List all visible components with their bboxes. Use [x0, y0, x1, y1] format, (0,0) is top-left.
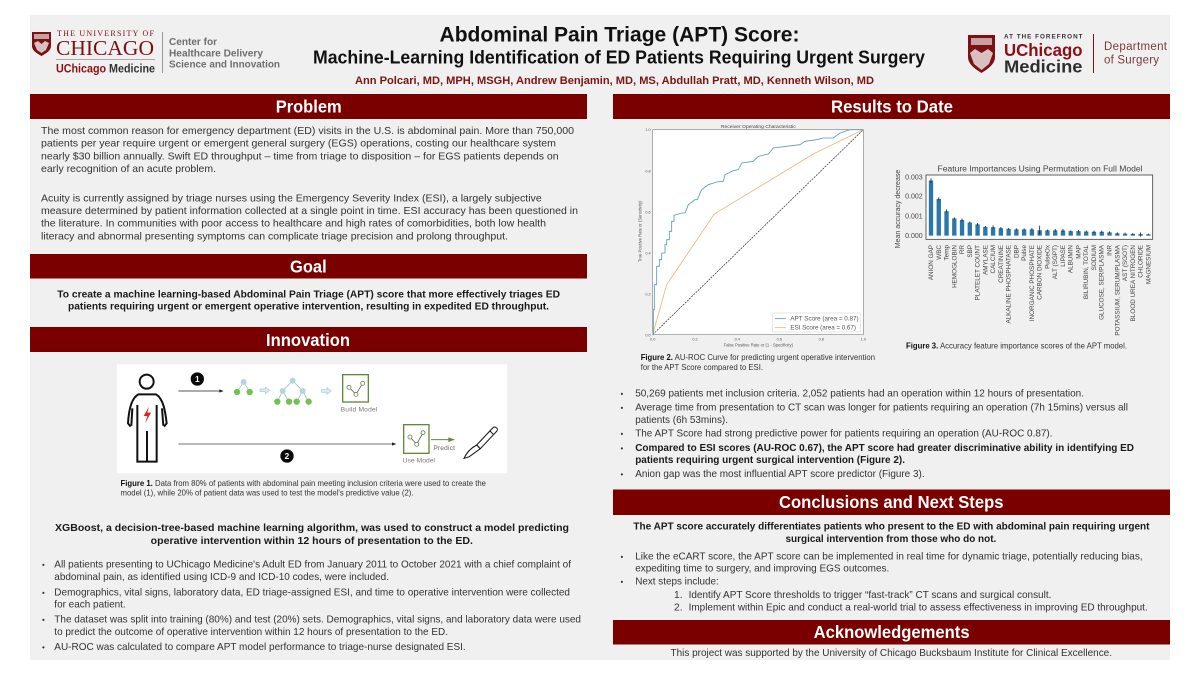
- logo: UChicago Medicine Department of Surgery: Department: [1104, 41, 1168, 53]
- caption: figure 2: [641, 353, 875, 372]
- chart: feature importances: 0.000: [905, 233, 923, 240]
- list: results bullets: •: [620, 470, 624, 479]
- list: methods bullets: to predict the outcome of operative intervention within 12 hours of presentation to the ED.: [54, 627, 448, 638]
- logo: UChicago Medicine Department of Surgery: of Surgery: [1104, 54, 1159, 66]
- chart: feature importances: HEMOGLOBIN: [951, 245, 958, 288]
- text: XGBoost statement: [55, 523, 569, 547]
- text: goal statement: [57, 289, 560, 312]
- chart: ROC curve: Receiver Operating Characteristic: [721, 124, 796, 130]
- chart: feature importances: [895, 165, 1153, 336]
- list: results bullets: •: [620, 444, 624, 453]
- text: goal statement: patients requiring urgent or emergent operative intervention, resulting in expedited ED throughput.: [68, 301, 549, 312]
- chart: ROC curve: [637, 124, 866, 347]
- list: methods bullets: All patients presenting to UChicago Medicine's Adult ED from January 2011 to October 2021 with a chief complaint of: [54, 560, 571, 570]
- text: problem paragraphs: nearly $30 billion annually. Swift ED throughput – time from triage to disposition – for EGS patients depends on: [41, 151, 559, 162]
- chart: feature importances: LIPASE: [1060, 245, 1067, 267]
- caption: figure 1: model (1), while 20% of patient data was used to test the model's predictive value (2).: [120, 488, 414, 498]
- chart: ROC curve: 0.6: [645, 211, 651, 215]
- icon: use model and predict: [403, 425, 455, 465]
- list: next steps: expediting time to surgery, and improving EGS outcomes.: [635, 564, 889, 574]
- chart: feature importances: Pulse: [1021, 245, 1028, 261]
- text: problem paragraphs: early recognition of an acute problem.: [41, 164, 216, 175]
- chart: ROC curve: True Positive Rate or (Sensitivity): [637, 200, 642, 262]
- icon: build model: [341, 375, 378, 413]
- text: conclusion statement: surgical intervention from those who do not.: [786, 534, 996, 545]
- text: goal statement: To create a machine learning-based Abdominal Pain Triage (APT) score that more effectively triages ED: [57, 289, 560, 300]
- icon: use model and predict: Predict: [433, 445, 455, 452]
- list: results bullets: Anion gap was the most influential APT score predictor (Figure 3).: [635, 469, 925, 480]
- arrow: testing path: [178, 442, 396, 463]
- text: problem paragraphs: measure determined by patient information collected at a single point in time. ESI accuracy has been questioned in: [41, 206, 578, 217]
- list: methods bullets: The dataset was split into training (80%) and test (20%) sets. Demographics, vital signs, and laboratory data were used: [54, 614, 581, 626]
- chart: ROC curve: 1.0: [861, 338, 866, 342]
- list: results bullets: patients (6h 53mins).: [635, 415, 728, 426]
- decision trees: [234, 378, 331, 405]
- logo: UChicago Medicine Department of Surgery: UChicago: [1004, 40, 1082, 60]
- list: next steps: Next steps include:: [635, 576, 719, 588]
- heading: results to date: [613, 94, 1170, 119]
- chart: ROC curve: 0.4: [645, 251, 652, 255]
- chart legend: ESI Score (area = 0.67): [790, 325, 856, 332]
- text: XGBoost statement: XGBoost, a decision-tree-based machine learning algorithm, was used to construct a model predicting: [55, 523, 569, 534]
- chart: feature importances: ALKALINE PHOSPHATASE: [1006, 245, 1013, 324]
- chart: feature importances: MAP: [1075, 245, 1082, 259]
- chart: ROC curve: 0.6: [777, 338, 782, 342]
- logo: University of Chicago Center for Healthcare Delivery: UChicago Medicine: [56, 64, 155, 76]
- list: results bullets: •: [620, 390, 624, 398]
- chart: ROC curve: 0.8: [645, 170, 651, 174]
- heading: innovation: Innovation: [266, 330, 350, 350]
- icon: scalpel: [464, 427, 497, 458]
- text: problem paragraphs: The most common reason for emergency department (ED) visits in the U.S. is abdominal pain. More than 750,000: [41, 126, 574, 137]
- chart: feature importances: INR: [1107, 245, 1114, 256]
- panel: conclusions and next steps: [613, 490, 1170, 614]
- title block: Ann Polcari, MD, MPH, MSGH, Andrew Benjamin, MD, MS, Abdullah Pratt, MD, Kenneth Wilson, MD: [355, 75, 874, 87]
- heading: problem: Problem: [276, 97, 342, 117]
- chart: feature importances: BILIRUBIN, TOTAL: [1083, 245, 1090, 299]
- chart: feature importances: CREATININE: [998, 245, 1005, 283]
- caption: figure 1: Figure 1. Data from 80% of patients with abdominal pain meeting inclusion criteria were used to create the: [120, 479, 486, 488]
- chart: feature importances: POTASSIUM, SERUM/PLASMA: [1114, 244, 1121, 336]
- chart: ROC curve: 0.8: [819, 338, 824, 342]
- chart: feature importances: CALCIUM: [990, 245, 997, 273]
- chart: feature importances: GLUCOSE, SER/PLASMA: [1099, 244, 1106, 320]
- list: results bullets: 50,269 patients met inclusion criteria. 2,052 patients had an operation within 12 hours of presentation.: [635, 388, 1084, 400]
- chart: feature importances: PLATELET COUNT: [975, 245, 982, 300]
- chart: feature importances: SBP: [967, 245, 974, 258]
- text: conclusion statement: [633, 522, 1150, 545]
- icon: patient with abdominal pain: [128, 375, 167, 462]
- list: methods bullets: [42, 560, 581, 653]
- list: methods bullets: •: [42, 643, 45, 652]
- chart: feature importances: RR: [959, 245, 966, 254]
- chart: feature importances: MAGNESIUM: [1145, 245, 1152, 284]
- arrow: training path: [178, 372, 224, 393]
- heading: problem: [30, 94, 587, 119]
- list: next steps: Like the eCART score, the APT score can be implemented in real time for dynamic triage, potentially reducing bias,: [635, 552, 1143, 562]
- chart: feature importances: WBC: [936, 245, 943, 260]
- caption: figure 1: [120, 479, 486, 498]
- chart: feature importances: 0.001: [905, 214, 923, 221]
- list: methods bullets: •: [42, 616, 45, 624]
- list: next steps: •: [620, 578, 624, 586]
- chart: feature importances: DBP: [1013, 245, 1020, 258]
- list: results bullets: Average time from presentation to CT scan was longer for patients requiring an operation (7h 15mins) versus all: [635, 402, 1128, 414]
- panel: innovation: [30, 327, 587, 653]
- chart: feature importances: Mean accuracy decrease: [895, 170, 902, 248]
- heading: conclusions and next steps: [613, 490, 1170, 515]
- logo: University of Chicago Center for Healthcare Delivery: THE UNIVERSITY OF: [57, 29, 155, 38]
- logo: UChicago Medicine Department of Surgery: Medicine: [1004, 56, 1083, 76]
- caption: figure 3: Figure 3. Accuracy feature importance scores of the APT model.: [906, 341, 1127, 350]
- chart: feature importances: ANION GAP: [928, 245, 935, 280]
- chart: ROC curve: 0.0: [645, 333, 651, 337]
- logo: University of Chicago Center for Healthcare Delivery: Center for: [169, 37, 217, 48]
- list: methods bullets: AU-ROC was calculated to compare APT model performance to triage-nurse designated ESI.: [54, 642, 466, 653]
- caption: figure 2: for the APT Score compared to ESI.: [641, 363, 763, 372]
- text: problem paragraphs: Acuity is currently assigned by triage nurses using the Emergency Severity Index (ESI), a largely subjective: [41, 194, 542, 204]
- panel: acknowledgements: [613, 620, 1170, 659]
- list: results bullets: The APT Score had strong predictive power for patients requiring an operation (AU-ROC 0.87).: [635, 428, 1052, 440]
- heading: innovation: [30, 327, 587, 352]
- title block: [313, 24, 925, 87]
- chart: feature importances: CARBON DIOXIDE: [1037, 245, 1044, 300]
- icon: use model and predict: Use Model: [403, 458, 436, 465]
- title block: Abdominal Pain Triage (APT) Score:: [440, 24, 800, 46]
- chart: ROC curve: 0.0: [650, 338, 655, 342]
- panel: goal: [30, 254, 587, 312]
- icon: build model: Build Model: [341, 406, 378, 413]
- chart legend: [773, 313, 861, 332]
- chart: ROC curve: 0.2: [645, 292, 651, 296]
- list: next steps: 2.: [674, 602, 683, 614]
- caption: figure 2: Figure 2. AU-ROC Curve for predicting urgent operative intervention: [641, 353, 875, 362]
- list: results bullets: •: [620, 404, 624, 412]
- list: results bullets: Compared to ESI scores (AU-ROC 0.67), the APT score had greater discriminative ability in identifying ED: [635, 443, 1134, 454]
- text: conclusion statement: The APT score accurately differentiates patients who present to the ED with abdominal pain requiring urgent: [633, 522, 1150, 532]
- list: methods bullets: abdominal pain, as identified using ICD-9 and ICD-10 codes, were included.: [54, 572, 389, 583]
- chart: feature importances: AST (SGOT): [1122, 245, 1129, 281]
- heading: goal: [30, 254, 587, 278]
- chart: feature importances: AMYLASE: [982, 245, 989, 275]
- chart: ROC curve: 0.4: [735, 338, 741, 342]
- logo: University of Chicago Center for Healthcare Delivery: Healthcare Delivery: [169, 48, 263, 59]
- chart: feature importances: ALBUMIN: [1068, 245, 1075, 273]
- chart: feature importances: CHLORIDE: [1138, 245, 1145, 278]
- chart: feature importances: SODIUM: [1091, 245, 1098, 270]
- chart: feature importances: ALT (SGPT): [1052, 245, 1059, 279]
- title block: Machine-Learning Identification of ED Patients Requiring Urgent Surgery: [313, 48, 925, 68]
- text: problem paragraphs: [41, 126, 578, 242]
- chart legend: APT Score (area = 0.87): [790, 316, 859, 323]
- chart: feature importances: Feature Importances Using Permutation on Full Model: [937, 165, 1143, 174]
- text: XGBoost statement: operative intervention within 12 hours of presentation to the ED.: [151, 536, 473, 547]
- heading: goal: Goal: [290, 257, 327, 277]
- list: methods bullets: •: [42, 588, 45, 598]
- chart: feature importances: 0.003: [905, 174, 923, 181]
- chart: feature importances: Temp: [944, 245, 951, 260]
- list: methods bullets: Demographics, vital signs, laboratory data, ED triage-assigned ESI, and time to operative intervention were collected: [54, 588, 570, 598]
- heading: conclusions and next steps: Conclusions and Next Steps: [779, 492, 1004, 512]
- chart: ROC curve: 1.0: [645, 128, 651, 132]
- arrow: testing path: 2: [285, 451, 290, 461]
- logo: University of Chicago Center for Healthcare Delivery: CHICAGO: [56, 36, 154, 60]
- chart: feature importances: BLOOD UREA NITROGEN: [1130, 245, 1137, 321]
- text: problem paragraphs: patients per year require urgent or emergent general surgery (EGS) operations, costing our healthcare system: [41, 139, 556, 150]
- list: next steps: •: [620, 552, 624, 562]
- arrow: training path: 1: [195, 374, 200, 384]
- panel: results to date: [613, 94, 1170, 480]
- list: next steps: 1.: [674, 590, 683, 601]
- list: results bullets: patients requiring urgent surgical intervention (Figure 2).: [635, 455, 905, 466]
- logo: UChicago Medicine Department of Surgery: AT THE FOREFRONT: [1004, 34, 1083, 40]
- list: next steps: [620, 552, 1148, 614]
- list: methods bullets: •: [42, 560, 45, 570]
- logo: UChicago Medicine Department of Surgery: [968, 34, 1168, 76]
- text: problem paragraphs: literacy and abnormal presenting symptoms can complicate triage precision and prolong throughput.: [41, 232, 508, 242]
- list: results bullets: •: [620, 430, 624, 438]
- text: problem paragraphs: the literature. In communities with poor access to healthcare and high rates of comorbidities, both low health: [41, 219, 546, 230]
- heading: acknowledgements: Acknowledgements: [814, 622, 970, 642]
- list: next steps: Implement within Epic and conduct a real-world trial to assess effectiveness in improving ED throughput.: [689, 602, 1148, 614]
- logo: University of Chicago Center for Healthcare Delivery: [32, 29, 280, 76]
- chart: feature importances: INORGANIC PHOSPHATE: [1029, 245, 1036, 321]
- chart: ROC curve: False Positive Rate or (1 - Specificity): [724, 342, 794, 347]
- panel: problem: [30, 94, 587, 242]
- figure 1 diagram: [117, 364, 507, 473]
- list: methods bullets: for each patient.: [54, 600, 126, 610]
- chart: ROC curve: 0.2: [692, 338, 698, 342]
- heading: acknowledgements: [613, 620, 1170, 644]
- chart: feature importances: PulseOx: [1044, 244, 1051, 269]
- list: results bullets: [620, 388, 1134, 480]
- heading: results to date: Results to Date: [831, 97, 953, 117]
- text: acknowledgement statement: This project was supported by the University of Chicago Bucksbaum Institute for Clinical Excellence.: [670, 648, 1112, 659]
- chart: feature importances: 0.002: [905, 194, 923, 201]
- logo: University of Chicago Center for Healthcare Delivery: Science and Innovation: [169, 60, 280, 71]
- list: next steps: Identify APT Score thresholds to trigger “fast-track” CT scans and surgical consult.: [689, 590, 1051, 601]
